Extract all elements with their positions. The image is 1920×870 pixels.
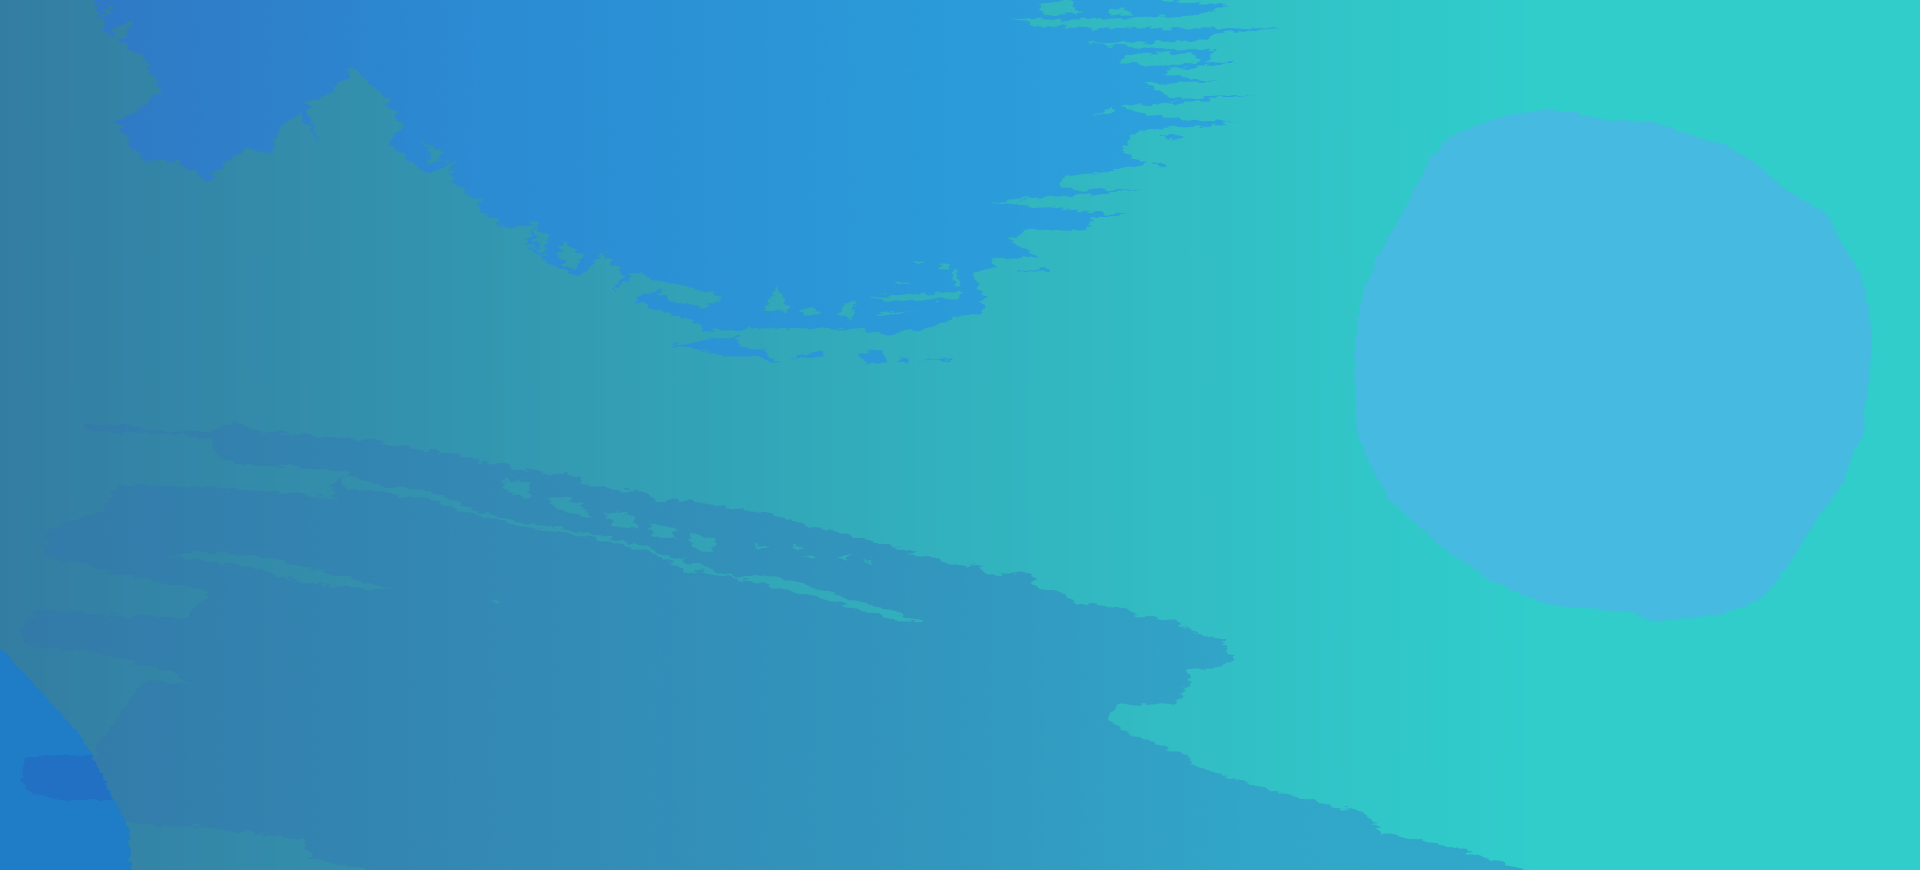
green gaps in stroke — [101, 0, 1200, 320]
lower brush stroke — [21, 423, 1567, 870]
green gaps in lower stroke — [165, 473, 921, 622]
right light-blue circle — [1355, 110, 1872, 622]
lower-left circle — [0, 642, 132, 870]
dark stroke patch in circle — [21, 755, 113, 800]
top brush stroke — [89, 0, 1284, 363]
